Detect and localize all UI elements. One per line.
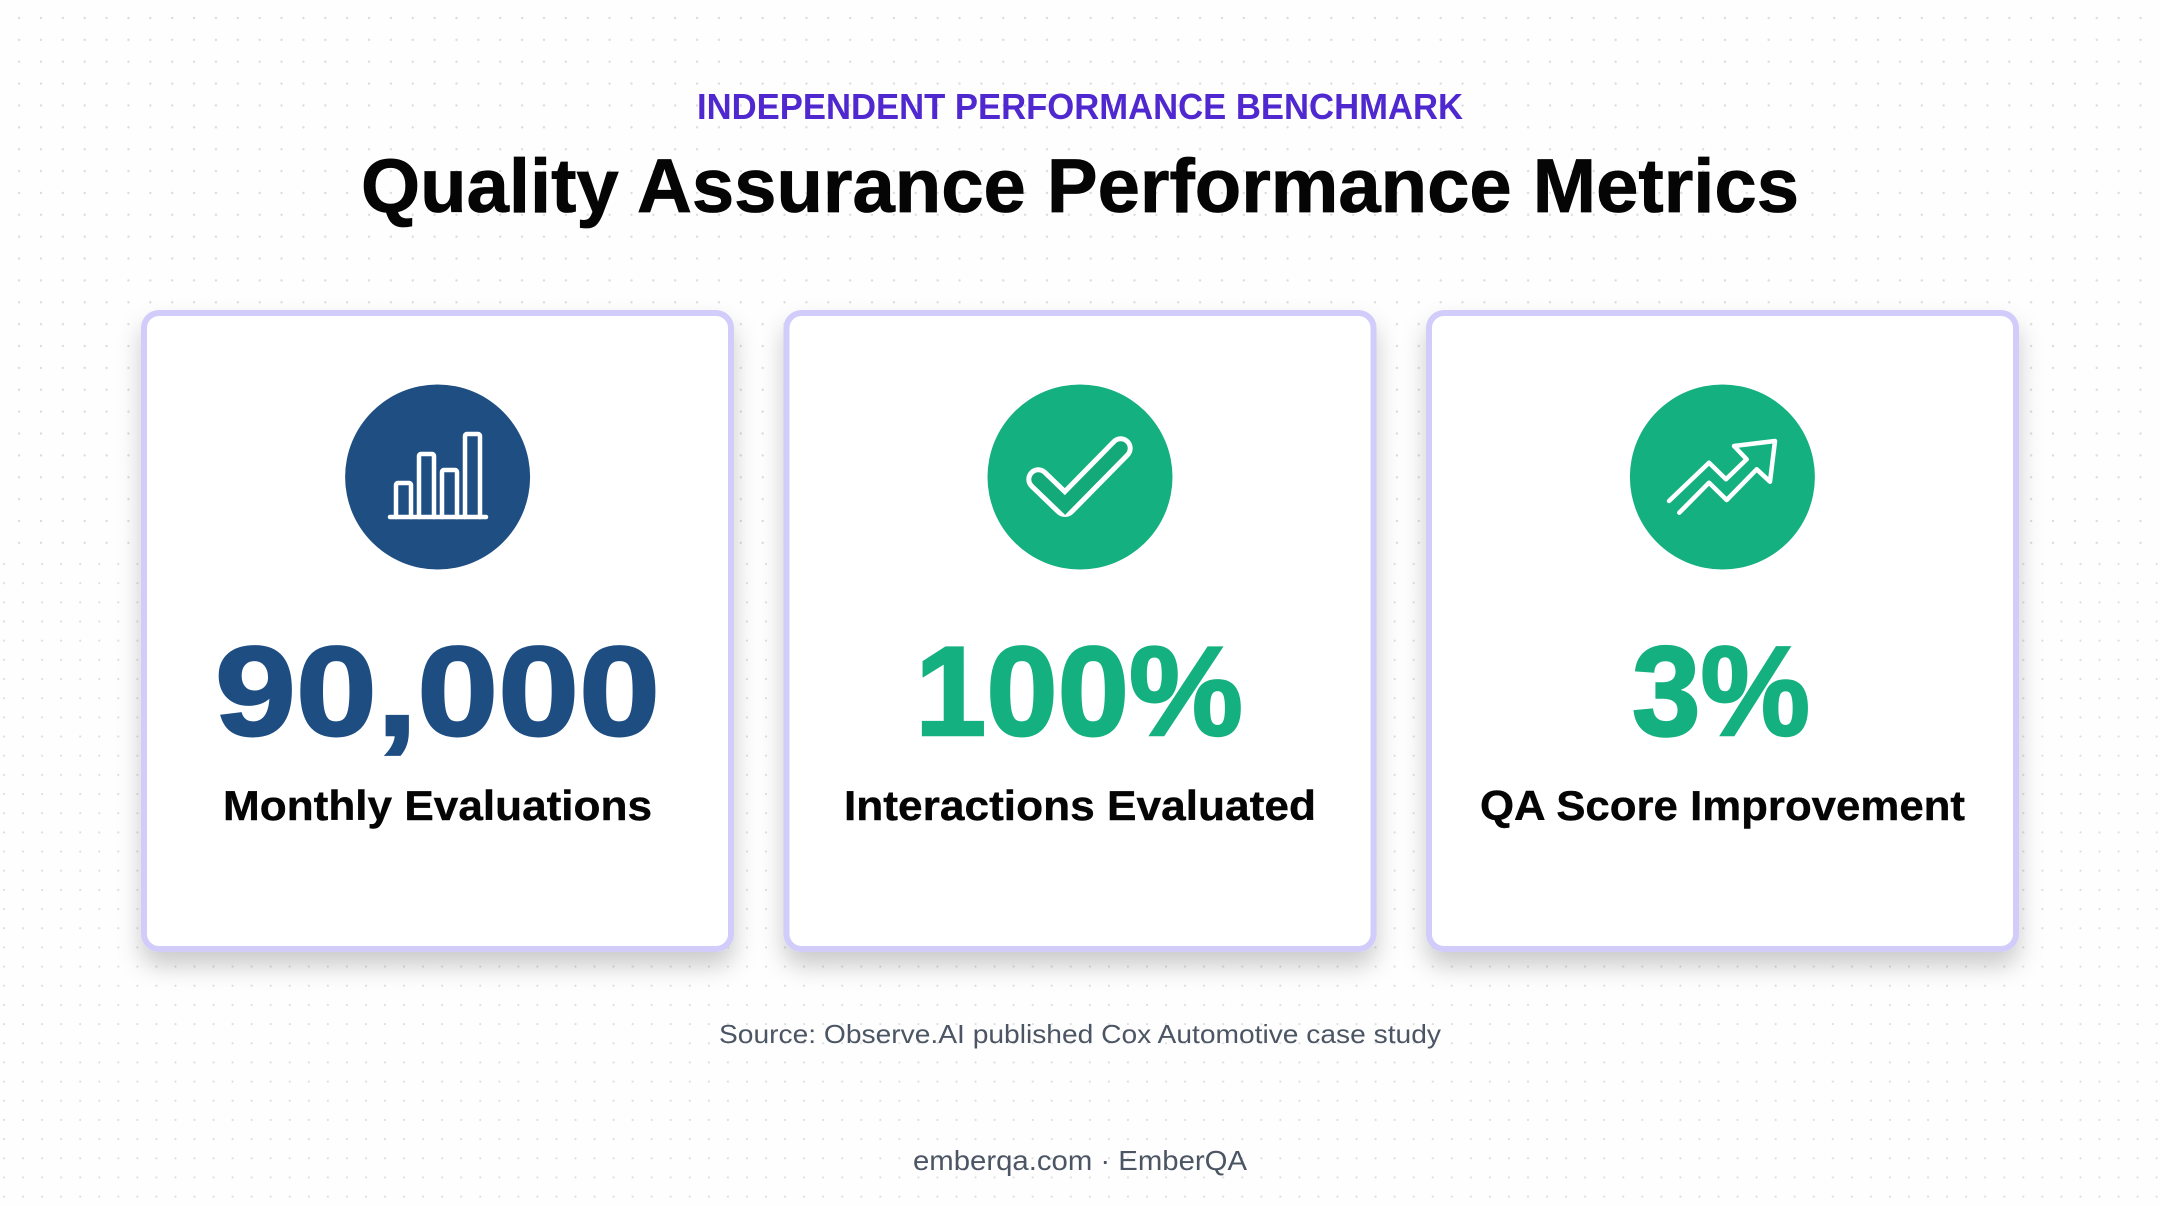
icon: check mark (988, 384, 1172, 570)
metric label: QA Score Improvement (1480, 782, 1965, 829)
panel: QA score improvement (1429, 313, 2016, 949)
metric label: Interactions Evaluated (844, 782, 1316, 829)
eyebrow heading: INDEPENDENT PERFORMANCE BENCHMARK (697, 86, 1463, 127)
metric label: Monthly Evaluations (223, 782, 652, 829)
metric value: 90,000 (215, 620, 660, 762)
icon: trending arrow (1630, 384, 1815, 570)
footer: emberqa.com · EmberQA (913, 1145, 1247, 1176)
metric value: 100% (915, 620, 1243, 762)
title: Quality Assurance Performance Metrics (361, 144, 1799, 229)
source note: Source: Observe.AI published Cox Automotive case study (719, 1019, 1441, 1049)
card background (144, 313, 731, 949)
metric value: 3% (1632, 620, 1810, 762)
panel: monthly evaluations (144, 313, 731, 949)
icon: bar chart (345, 384, 530, 570)
panel: interactions evaluated (786, 313, 1374, 949)
card background (1429, 313, 2016, 949)
card background (786, 313, 1374, 949)
